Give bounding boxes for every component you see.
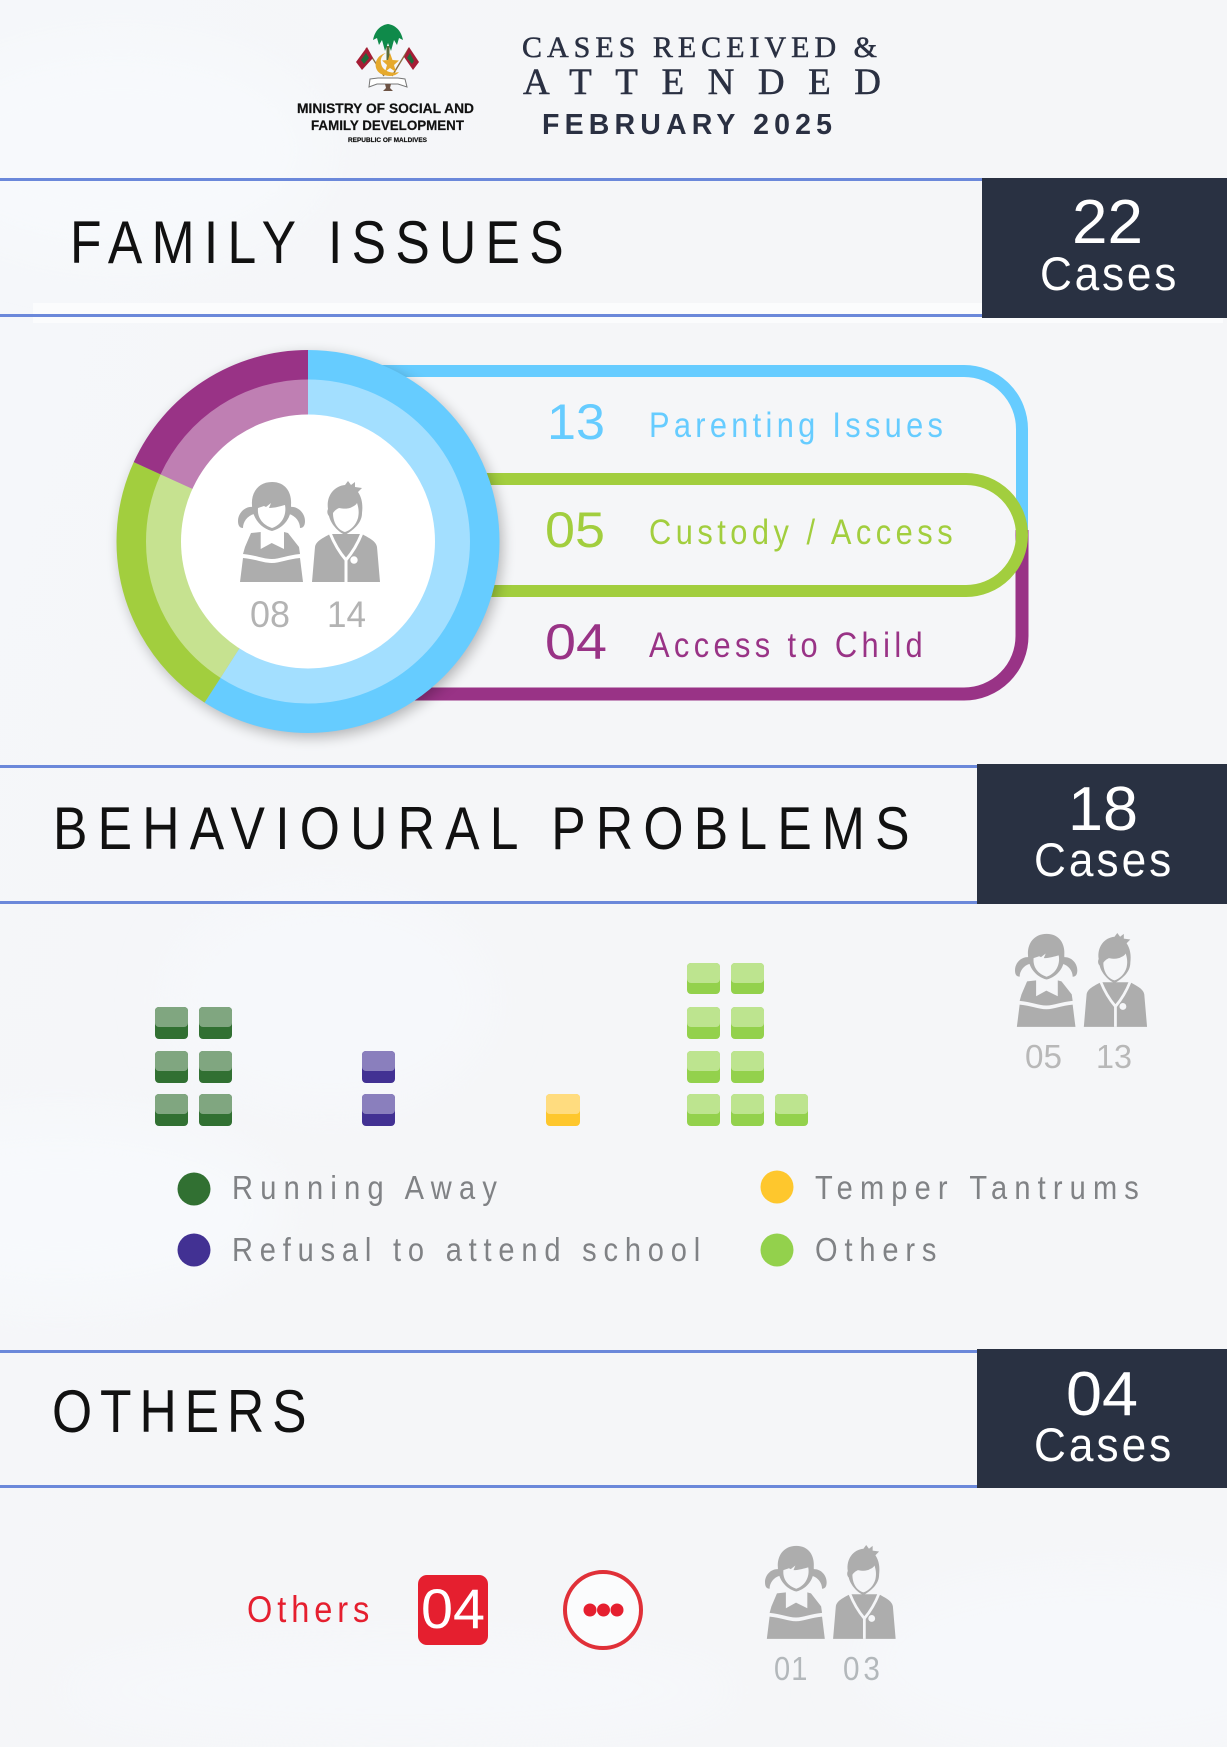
row: access to child: 04 [545,614,607,670]
section header: family issues [0,178,1227,318]
count: 22 cases: 22 [1072,188,1143,257]
gender counts 05 13 [1025,1038,1132,1075]
report title: FEBRUARY 2025 [542,109,832,141]
gender counts 05 13: 05 [1025,1038,1062,1075]
legend: Temper Tantrums [815,1169,1139,1206]
legend: Running Away [232,1169,497,1206]
panel: behavioural problems chart [155,933,1147,1268]
logo text: REPUBLIC OF MALDIVES [348,137,428,144]
blocks: refusal to attend school [362,1051,395,1126]
count: 04 cases [1034,1360,1171,1471]
section header: others [0,1349,1227,1488]
section header: behavioural problems [0,764,1227,904]
heading: behavioural problems: BEHAVIOURAL PROBLEMS [53,794,910,862]
logo text: FAMILY DEVELOPMENT [311,117,464,133]
count: 18 cases: Cases [1034,834,1171,886]
legend: Others [815,1231,936,1268]
blocks: running away [155,1007,232,1126]
count: 22 cases: Cases [1040,248,1176,300]
heading: others: OTHERS [52,1377,307,1445]
panel: others chart [247,1545,896,1687]
connector: custody access [470,479,1022,591]
report title [522,31,881,141]
icon: girl and boy [1015,933,1147,1027]
count: 18 cases: 18 [1068,775,1138,844]
logo text: MINISTRY OF SOCIAL AND [297,100,474,116]
donut chart [120,355,502,737]
heading: family issues: FAMILY ISSUES [70,208,564,276]
row: access to child: Access to Child [649,625,923,664]
gender counts 01 03: 01 [774,1650,807,1687]
gender counts 08 14: 08 [250,594,290,635]
gender counts 01 03 [774,1650,880,1687]
row: custody access [545,502,953,558]
count: 04 cases: Cases [1034,1419,1171,1471]
legend: Refusal to attend school [232,1231,700,1268]
logo text [297,100,474,144]
logo: national emblem [356,24,419,91]
row: parenting issues: Parenting Issues [649,405,943,444]
icon: girl and boy [765,1545,896,1639]
icon: girl and boy [238,481,380,582]
row: custody access: 05 [545,502,605,558]
report title: CASES RECEIVED & [522,31,877,64]
count badge: 04 [421,1577,485,1640]
row: parenting issues [547,394,943,450]
report title: ATTENDED [523,62,881,103]
icon: more options [565,1572,641,1648]
gender counts 08 14: 14 [327,594,366,635]
connector: access to child [400,530,1022,694]
header [297,24,881,144]
legend [178,1169,1139,1268]
count: 18 cases [1034,775,1171,886]
label: others: Others [247,1589,369,1630]
connector: parenting issues [370,371,1022,545]
gender counts 01 03: 03 [843,1651,880,1687]
row: custody access: Custody / Access [649,512,953,551]
count: 22 cases [1040,188,1176,300]
gender counts 05 13: 13 [1096,1038,1132,1075]
blocks: temper tantrums [546,1094,580,1126]
blocks: others [687,963,808,1126]
panel: family issues chart [120,355,1022,737]
row: parenting issues: 13 [547,394,605,450]
row: access to child [545,614,923,670]
count: 04 cases: 04 [1066,1360,1138,1429]
gender counts 08 14 [250,594,366,635]
